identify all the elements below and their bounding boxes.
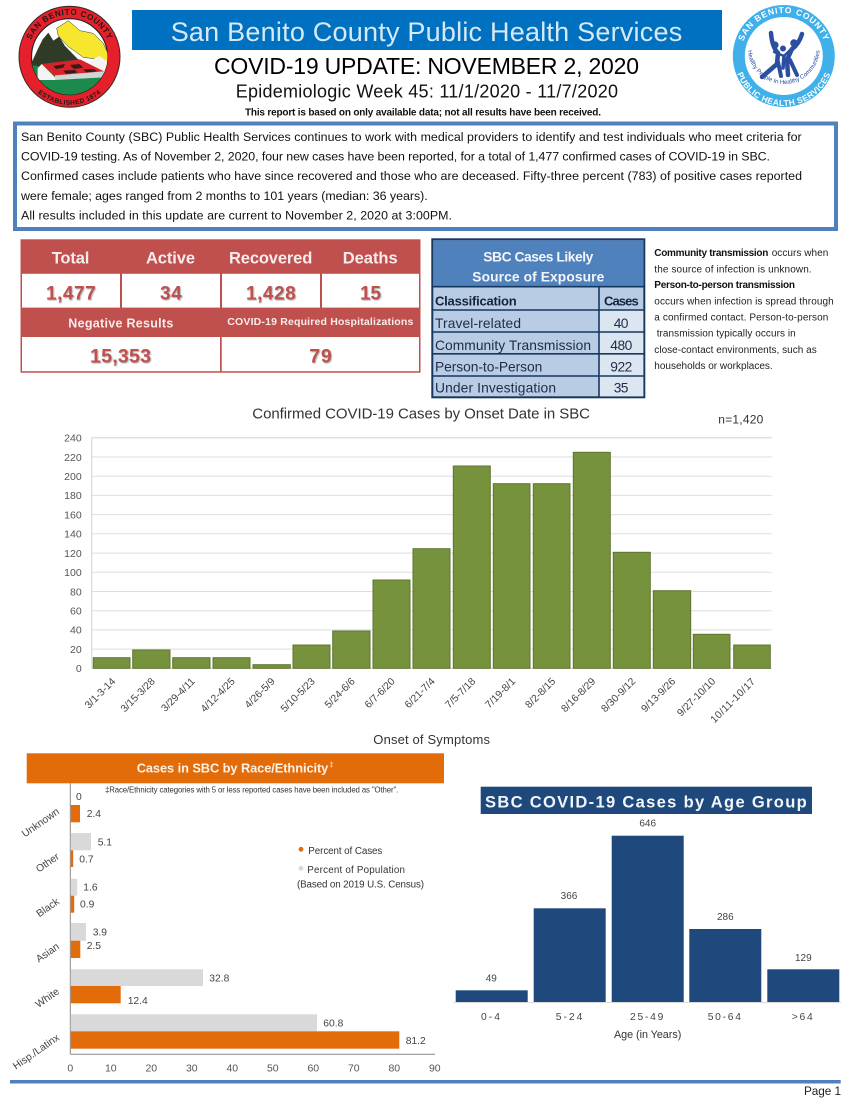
heading banner — [132, 10, 722, 50]
chart: cases by age group — [453, 787, 841, 1041]
navy bars — [456, 836, 839, 1002]
totals values: 1,428 — [246, 283, 296, 304]
y axis labels: 180 — [64, 490, 82, 502]
x axis labels: 80 — [388, 1063, 400, 1075]
bar values: 32.8 — [209, 973, 230, 984]
x axis date labels: 3/1-3-14 — [83, 676, 118, 711]
x axis date labels: 5/24-6/6 — [323, 676, 358, 711]
y axis labels: 80 — [70, 586, 82, 598]
panel: likely source of exposure table — [432, 239, 644, 397]
bar values — [486, 819, 812, 985]
table column headers: Cases — [604, 293, 639, 308]
negative and hospitalization values: 15,353 — [90, 345, 151, 367]
chart title: Confirmed COVID-19 Cases by Onset Date in SBC — [252, 405, 590, 422]
table heading — [472, 250, 605, 285]
text block: transmission definitions: Person-to-person transmission — [654, 280, 795, 291]
category labels: Asian — [34, 941, 62, 965]
age labels: >64 — [792, 1012, 813, 1023]
category labels — [11, 806, 62, 1072]
bar values: 2.5 — [87, 941, 101, 952]
x axis date labels: 4/26-5/9 — [243, 676, 278, 711]
x axis labels: 70 — [348, 1063, 360, 1075]
bar values: 81.2 — [406, 1036, 426, 1047]
age labels — [481, 1012, 813, 1023]
table rows: 40 — [614, 316, 629, 331]
table rows: 922 — [610, 360, 632, 375]
bar values: 1.6 — [83, 883, 98, 894]
title: COVID-19 UPDATE: NOVEMBER 2, 2020 — [214, 53, 639, 79]
x axis date labels: 9/27-10/10 — [676, 676, 718, 719]
population bars — [71, 833, 317, 1031]
table column headers — [435, 293, 639, 308]
totals values: 15 — [360, 283, 381, 304]
x axis labels: 40 — [226, 1063, 238, 1075]
x axis labels: 0 — [67, 1063, 73, 1075]
x axis date labels: 6/21-7/4 — [403, 676, 438, 711]
chart: cases by race and ethnicity — [11, 753, 444, 1075]
table rows — [435, 316, 633, 396]
totals column headers: Active — [146, 249, 195, 267]
y axis labels: 120 — [64, 548, 82, 560]
totals values: 34 — [160, 283, 182, 304]
category labels: Unknown — [20, 806, 62, 840]
x axis title: Onset of Symptoms — [373, 732, 490, 747]
table rows: Person-to-Person — [435, 360, 542, 375]
age labels: 50-64 — [708, 1012, 741, 1023]
x axis date labels: 8/30-9/12 — [600, 676, 638, 715]
x axis date labels: 7/5-7/18 — [444, 676, 478, 711]
x axis labels: 30 — [186, 1063, 198, 1075]
panel: summary text: Confirmed cases include patients who have since recovered and those who are deceased. Fifty-three percent (783) of positive cases reported — [21, 169, 802, 183]
x axis labels: 20 — [145, 1063, 157, 1075]
text block: transmission definitions — [654, 248, 834, 372]
text block: transmission definitions: occurs when — [772, 248, 828, 259]
x axis date labels: 10/11-10/17 — [709, 676, 758, 726]
panel: summary text — [15, 124, 836, 229]
panel: summary text: COVID-19 testing. As of November 2, 2020, four new cases have been reported, for a total of 1,477 confirmed cases of COVID-19 in SBC. — [21, 150, 770, 164]
x axis labels — [67, 1063, 441, 1075]
chart heading — [27, 753, 444, 783]
table heading: Source of Exposure — [472, 270, 605, 285]
bar values: 0.9 — [80, 899, 95, 910]
chart heading: Cases in SBC by Race/Ethnicity — [137, 760, 329, 775]
negative and hospitalization headers — [68, 316, 413, 330]
bar values — [76, 792, 426, 1047]
logo: San Benito County seal: SAN BENITO COUNTY — [26, 9, 113, 40]
table rows: Travel-related — [435, 316, 521, 331]
text block: transmission definitions: a confirmed contact. Person-to-person — [654, 312, 828, 323]
y axis labels: 60 — [70, 606, 82, 618]
bar values: 366 — [561, 891, 578, 902]
x axis date labels: 8/16-8/29 — [560, 676, 598, 715]
x axis labels: 50 — [267, 1063, 279, 1075]
table column headers: Classification — [435, 293, 517, 308]
table rows: 35 — [614, 381, 629, 396]
footer rule — [10, 1080, 841, 1084]
x axis labels: 90 — [429, 1063, 441, 1075]
bar values: 5.1 — [98, 837, 112, 848]
totals column headers: Total — [52, 249, 89, 267]
totals column headers: Recovered — [229, 249, 312, 267]
page number: Page 1 — [804, 1084, 841, 1098]
logo: Public Health Services: Healthy People In Healthy Communities — [748, 50, 820, 84]
x axis date labels: 3/15-3/28 — [119, 676, 158, 715]
totals column headers — [52, 249, 398, 267]
age labels: 25-49 — [630, 1012, 664, 1023]
bar values: 646 — [639, 819, 656, 830]
category labels: White — [34, 986, 62, 1011]
negative and hospitalization values: 79 — [309, 345, 332, 367]
heading banner: San Benito County Public Health Services — [171, 17, 682, 47]
table rows: Under Investigation — [435, 381, 556, 396]
y axis labels: 140 — [64, 529, 82, 541]
negative and hospitalization headers: COVID-19 Required Hospitalizations — [227, 316, 413, 328]
x axis date labels: 5/10-5/23 — [279, 676, 318, 715]
panel: summary text: San Benito County (SBC) Public Health Services continues to work with medical providers to identify and test individuals who meet criteria for — [21, 130, 802, 144]
logo: San Benito County seal: ESTABLISHED 1874 — [38, 90, 100, 105]
x axis date labels: 9/13-9/26 — [640, 676, 678, 715]
bar values: 3.9 — [93, 928, 107, 939]
text block: transmission definitions: the source of infection is unknown. — [654, 264, 812, 275]
table rows: Community Transmission — [435, 338, 591, 353]
chart: confirmed cases by onset date — [64, 405, 772, 747]
chart heading: SBC COVID-19 Cases by Age Group — [485, 793, 807, 811]
bar values: 2.4 — [87, 809, 101, 820]
data note: This report is based on only available data; not all results have been received. — [245, 108, 601, 119]
x axis date labels — [83, 676, 758, 726]
panel: case totals table — [20, 239, 420, 373]
category labels: Hisp./Latinx — [11, 1032, 62, 1072]
x axis title: Age (in Years) — [614, 1029, 681, 1041]
y axis labels: 40 — [70, 625, 82, 637]
legend: Percent of Cases — [308, 846, 382, 857]
panel: summary text: were female; ages ranged from 2 months to 101 years (median: 36 years). — [20, 189, 428, 203]
totals values — [46, 283, 381, 304]
bar values: 286 — [717, 912, 734, 923]
footnote: ‡Race/Ethnicity categories with 5 or less reported cases have been included as "Other". — [105, 785, 398, 794]
logo: Public Health Services: SAN BENITO COUNTY — [738, 7, 830, 41]
bar values: 129 — [795, 953, 812, 964]
y axis labels: 20 — [70, 644, 82, 656]
bar values: 60.8 — [323, 1019, 344, 1030]
panel: summary text: All results included in this update are current to November 2, 2020 at 3:00PM. — [21, 208, 452, 222]
legend: (Based on 2019 U.S. Census) — [297, 879, 424, 890]
green bars — [93, 452, 770, 668]
text block: transmission definitions: households or workplaces. — [654, 361, 773, 372]
y axis labels: 200 — [64, 471, 82, 483]
y axis labels — [64, 432, 82, 675]
chart heading: ‡ — [330, 762, 334, 769]
x axis date labels: 6/7-6/20 — [363, 676, 398, 711]
y axis labels: 0 — [76, 663, 82, 675]
age labels: 0-4 — [481, 1012, 500, 1023]
negative and hospitalization values — [90, 345, 332, 367]
y axis labels: 240 — [64, 432, 82, 444]
bar values: 12.4 — [128, 996, 148, 1007]
logo: Public Health Services: PUBLIC HEALTH SERVICES — [737, 72, 830, 106]
chart heading — [481, 787, 812, 814]
y axis labels: 220 — [64, 452, 82, 464]
y axis labels: 160 — [64, 509, 82, 521]
table rows: 480 — [610, 338, 633, 353]
x axis labels: 10 — [105, 1063, 117, 1075]
logo: San Benito County seal — [18, 6, 120, 108]
case bars — [71, 805, 399, 1049]
table heading: SBC Cases Likely — [483, 250, 594, 265]
totals column headers: Deaths — [343, 249, 398, 267]
legend: Percent of Population — [307, 865, 405, 876]
subtitle: epidemiologic week: Epidemiologic Week 45: 11/1/2020 - 11/7/2020 — [236, 81, 618, 101]
totals values: 1,477 — [46, 283, 96, 304]
text block: transmission definitions: Community transmission — [654, 248, 768, 259]
legend — [297, 846, 424, 890]
text block: transmission definitions: transmission typically occurs in — [657, 329, 796, 340]
text block: transmission definitions: close-contact environments, such as — [654, 345, 817, 356]
age labels: 5-24 — [556, 1012, 583, 1023]
bar values: 0 — [76, 792, 82, 803]
category labels: Other — [34, 851, 62, 875]
x axis date labels: 4/12-4/25 — [199, 676, 238, 715]
x axis date labels: 7/19-8/1 — [484, 676, 518, 711]
text block: transmission definitions: occurs when infection is spread through — [654, 296, 834, 307]
sample size note: n=1,420 — [718, 412, 764, 426]
y axis labels: 100 — [64, 567, 82, 579]
bar values: 0.7 — [79, 855, 94, 866]
x axis date labels: 8/2-8/15 — [524, 676, 558, 711]
category labels: Black — [35, 896, 62, 920]
negative and hospitalization headers: Negative Results — [68, 316, 173, 330]
logo: Public Health Services — [732, 5, 835, 107]
bar values: 49 — [486, 974, 497, 985]
x axis date labels: 3/29-4/11 — [160, 676, 198, 714]
x axis labels: 60 — [307, 1063, 319, 1075]
